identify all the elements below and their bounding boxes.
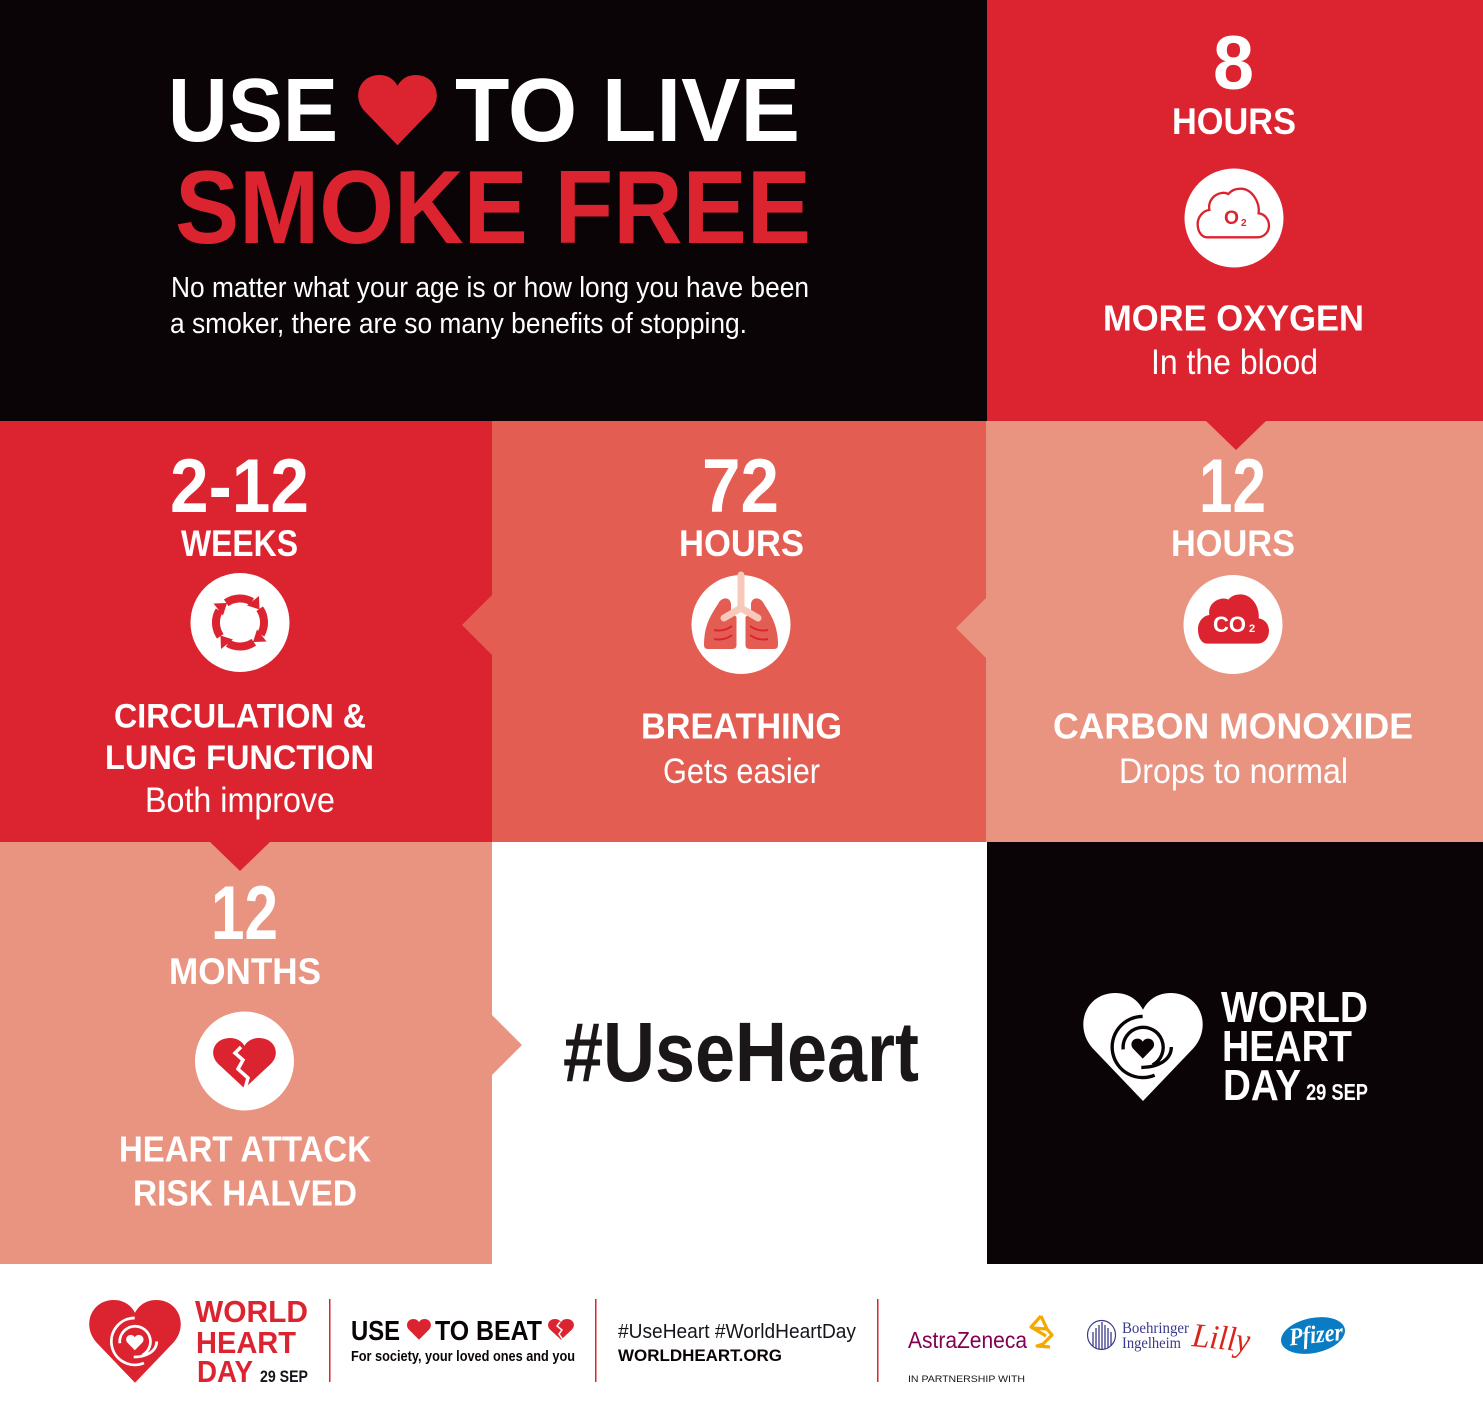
icon: circulation arrows [190, 573, 290, 672]
time: 2-12 weeks [170, 444, 309, 564]
panel: 12 months [0, 842, 522, 1264]
intro text [170, 272, 809, 340]
icon: CO2 cloud: 2 [1249, 623, 1255, 635]
label: more oxygen: MORE OXYGEN [1103, 298, 1364, 338]
heading: use heart to live: TO LIVE [455, 61, 800, 161]
time: 8 hours: 8 [1213, 21, 1254, 106]
heading: use heart to live: USE [168, 61, 338, 161]
logo text [1221, 983, 1368, 1110]
label: carbon monoxide: Drops to normal [1119, 752, 1348, 791]
logo text: DAY [1223, 1061, 1301, 1110]
footer logo [89, 1294, 308, 1389]
time: 72 hours [679, 444, 804, 564]
time: 12 hours: 12 [1199, 444, 1266, 529]
panel: 2-12 weeks [0, 421, 492, 871]
icon: oxygen cloud [1184, 168, 1284, 268]
panel: world heart day logo [987, 842, 1483, 1264]
time: 8 hours: HOURS [1172, 101, 1296, 142]
logo text: 29 SEP [1306, 1079, 1368, 1105]
label: circulation and lung function: Both improve [145, 781, 335, 820]
time: 2-12 weeks: WEEKS [181, 523, 298, 564]
partner: Lilly: Lilly [1189, 1317, 1253, 1360]
campaign slogan [351, 1315, 575, 1365]
heading: use heart to live [168, 61, 800, 161]
partner: Boehringer Ingelheim: Boehringer [1122, 1320, 1190, 1337]
arrow: down to 12 hours [1206, 421, 1266, 450]
partner: Pfizer: Pfizer [1287, 1319, 1345, 1352]
icon: CO2 cloud: CO [1213, 612, 1246, 637]
partner: AstraZeneca [908, 1316, 1052, 1353]
campaign slogan: TO BEAT [435, 1315, 542, 1346]
hashtags and website: WORLDHEART.ORG [618, 1346, 782, 1365]
partner: Pfizer [1278, 1312, 1348, 1359]
arrow: left to 2-12 weeks [462, 595, 492, 655]
label: carbon monoxide [1053, 706, 1413, 791]
footer logo: WORLD [195, 1294, 308, 1329]
arrow: right from title [987, 172, 1017, 238]
icon: oxygen cloud: O [1224, 208, 1239, 229]
label: carbon monoxide: CARBON MONOXIDE [1053, 706, 1413, 746]
time: 2-12 weeks: 2-12 [170, 444, 309, 529]
icon: CO2 cloud [1184, 575, 1282, 674]
time: 12 hours [1171, 444, 1295, 564]
hashtags and website [618, 1321, 856, 1365]
time: 72 hours: HOURS [679, 523, 804, 564]
arrow: left to 72 hours [956, 598, 986, 658]
icon: white heart logo [1083, 993, 1203, 1101]
panel: 12 hours [956, 421, 1483, 842]
footer [89, 1294, 1348, 1389]
partner: Boehringer Ingelheim: Ingelheim [1122, 1335, 1181, 1352]
intro text: a smoker, there are so many benefits of stopping. [170, 308, 747, 340]
campaign slogan: For society, your loved ones and you [351, 1349, 575, 1365]
hashtag text: #UseHeart [563, 1005, 919, 1099]
label: circulation and lung function [105, 698, 374, 820]
hashtags and website: #UseHeart #WorldHeartDay [618, 1321, 856, 1343]
label: breathing gets easier [641, 706, 842, 791]
label: circulation and lung function: CIRCULATION & [114, 698, 366, 736]
label: heart attack risk halved [119, 1128, 371, 1214]
label: breathing gets easier: BREATHING [641, 706, 842, 746]
panel: 8 hours [987, 0, 1483, 450]
label: heart attack risk halved: RISK HALVED [133, 1172, 357, 1214]
time: 12 hours: HOURS [1171, 523, 1295, 564]
label: more oxygen [1103, 298, 1364, 382]
panel: hashtag [492, 842, 987, 1264]
logo text: WORLD [1221, 983, 1368, 1032]
time: 12 months [169, 871, 321, 992]
label: heart attack risk halved: HEART ATTACK [119, 1128, 371, 1170]
footer logo: 29 SEP [260, 1367, 308, 1386]
time: 72 hours: 72 [702, 444, 779, 529]
arrow: right to hashtag [492, 1015, 522, 1075]
icon: broken heart [195, 1012, 294, 1110]
time: 12 months: 12 [211, 871, 278, 956]
partner: AstraZeneca: AstraZeneca [908, 1327, 1027, 1353]
heading: smoke free: SMOKE FREE [175, 150, 811, 266]
intro text: No matter what your age is or how long you have been [171, 272, 809, 304]
arrow: down to 12 months [210, 842, 270, 871]
icon: lungs [692, 575, 790, 674]
icon: oxygen cloud: 2 [1241, 218, 1247, 229]
partner: Boehringer Ingelheim [1088, 1320, 1190, 1352]
footer logo: DAY [197, 1354, 253, 1389]
panel: title [0, 0, 987, 421]
footer logo: HEART [196, 1325, 296, 1360]
campaign slogan: USE [351, 1315, 400, 1346]
label: circulation and lung function: LUNG FUNCTION [105, 739, 374, 777]
time: 8 hours [1172, 21, 1296, 142]
label: more oxygen: In the blood [1151, 343, 1318, 382]
label: breathing gets easier: Gets easier [663, 752, 820, 791]
time: 12 months: MONTHS [169, 951, 321, 992]
partner label: IN PARTNERSHIP WITH [908, 1374, 1025, 1385]
panel: 72 hours [462, 421, 986, 842]
logo text: HEART [1222, 1022, 1352, 1071]
